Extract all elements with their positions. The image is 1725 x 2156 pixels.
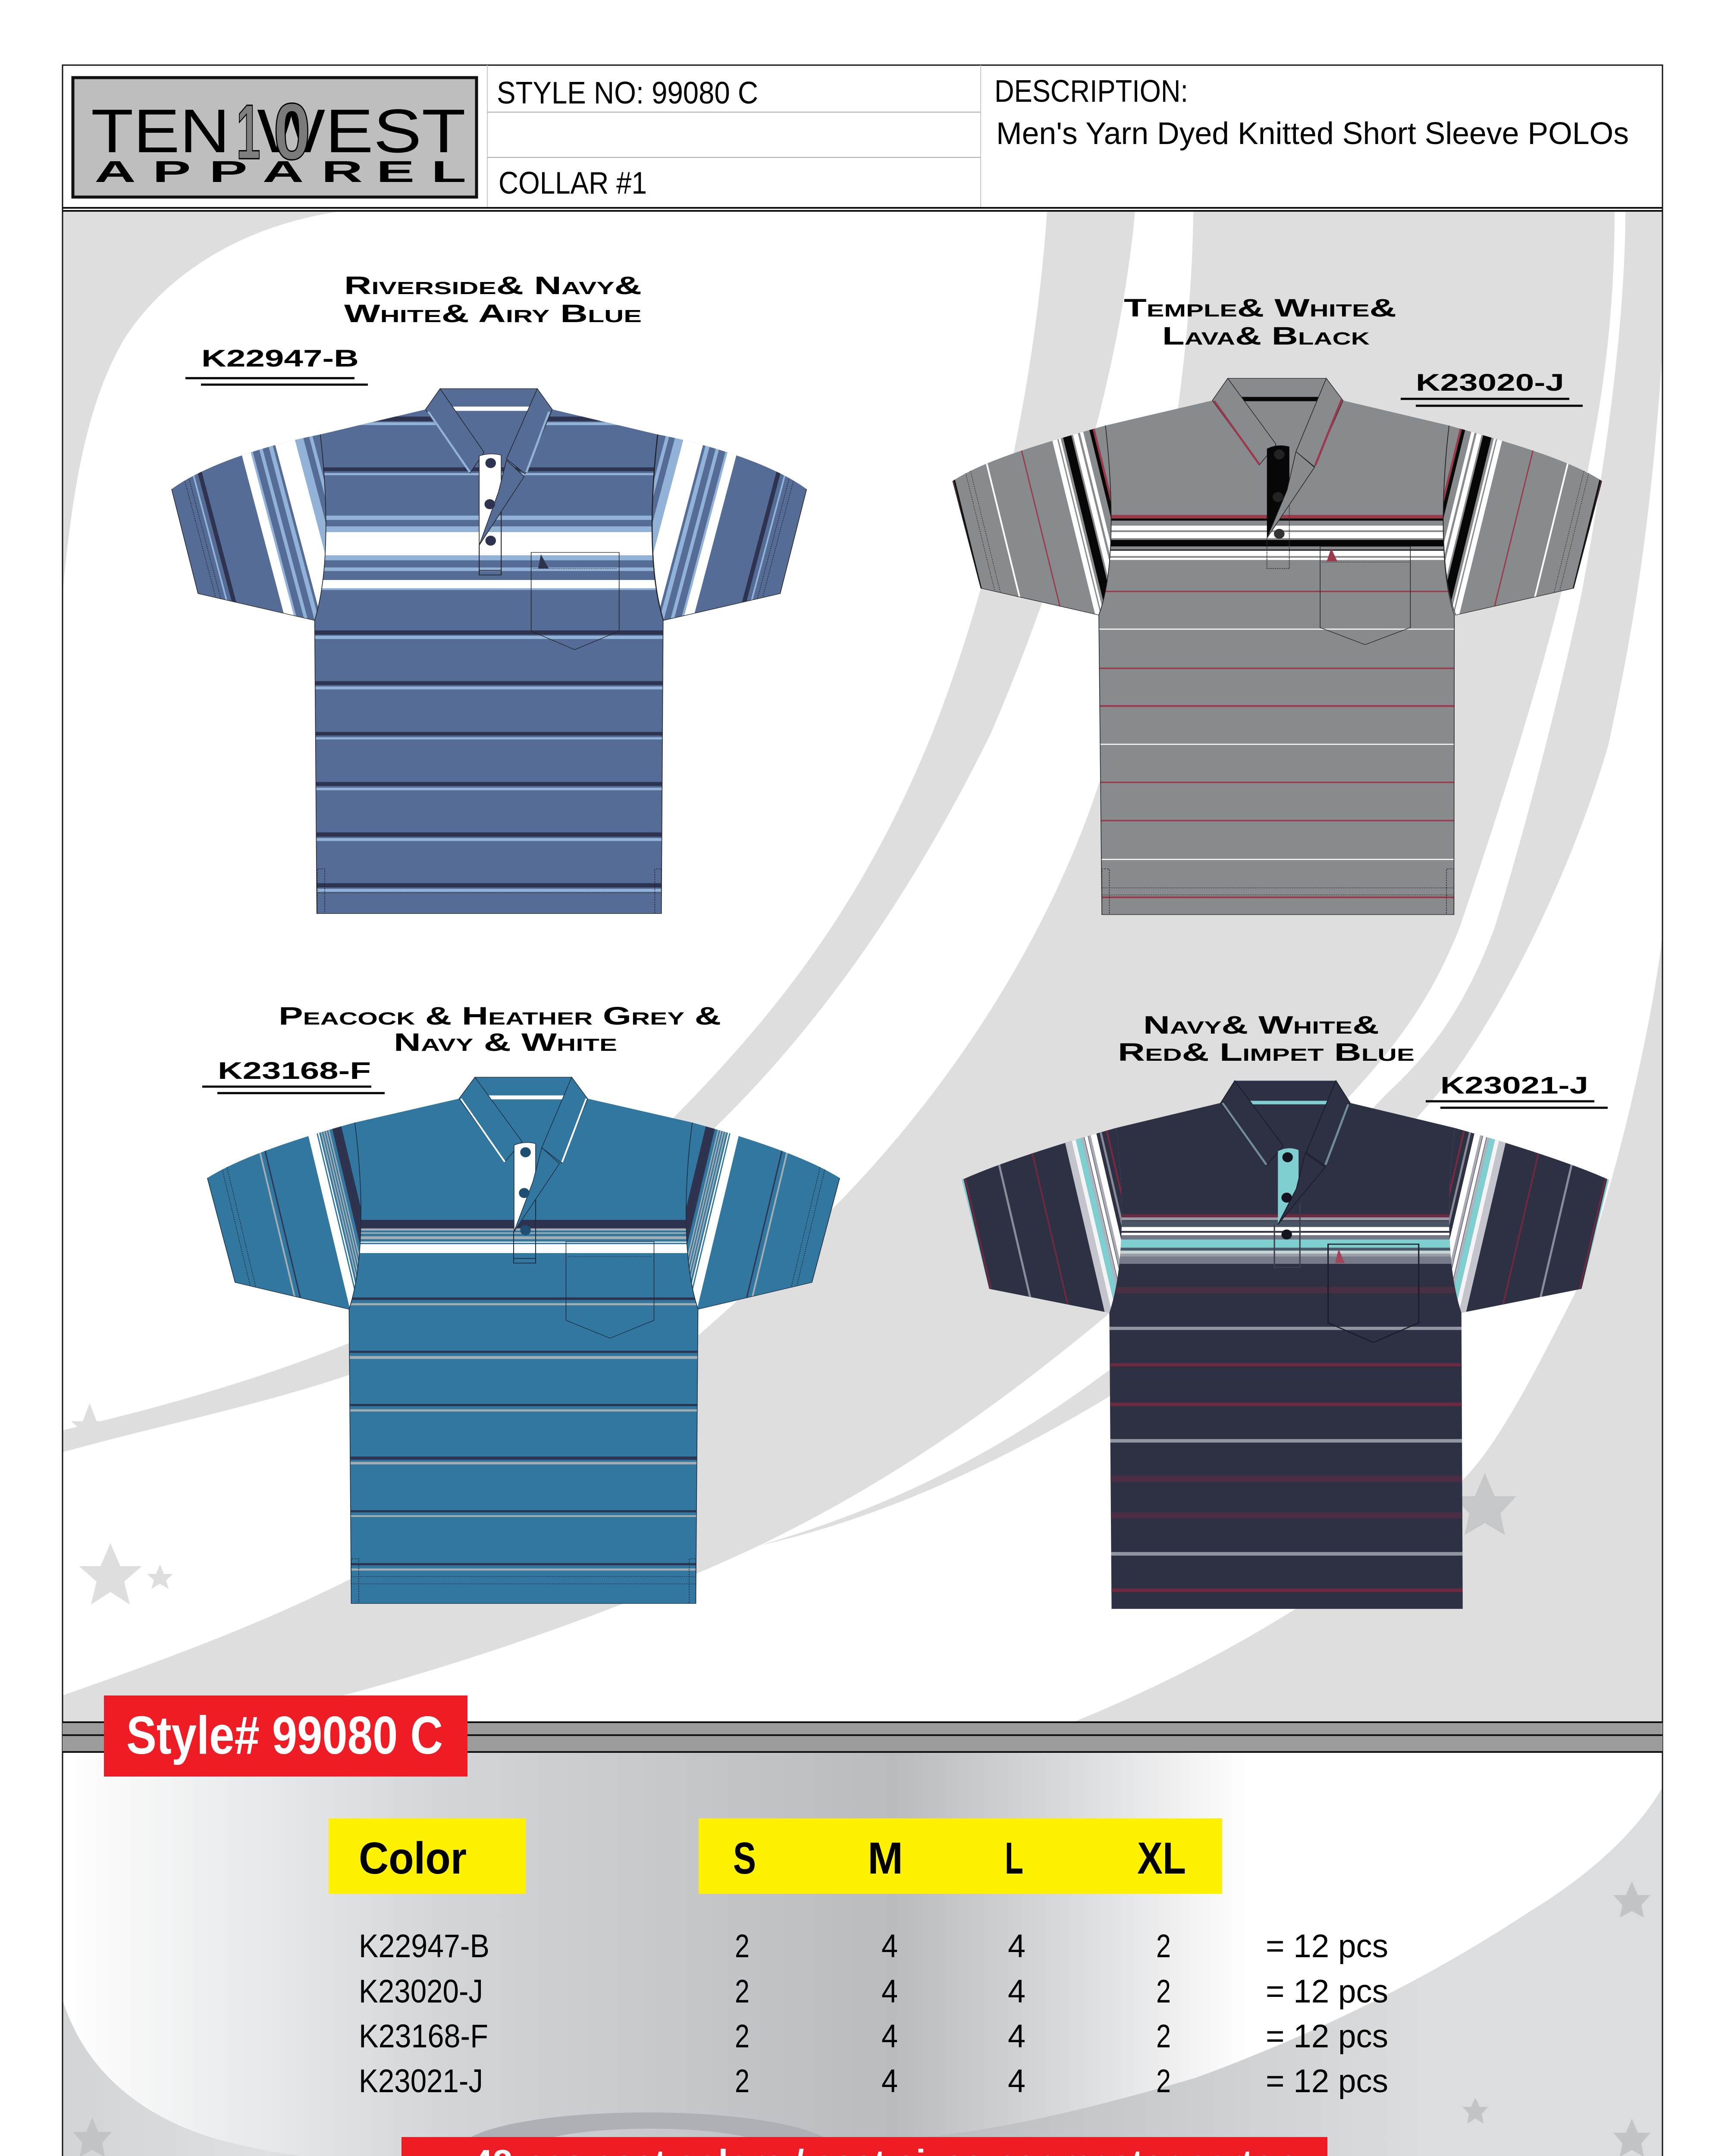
chest pocket [566,1242,654,1338]
table row: K23020-J: 4 [881,1973,898,2010]
swoosh: right band tapering to a sliver [759,211,1663,1545]
table row: K23020-J: 4 [1008,1973,1026,2010]
swoosh: top-left corner [63,211,345,595]
style banner: Style# 99080 C [126,1706,443,1765]
table row: K23168-F: 4 [881,2018,898,2055]
collar note: COLLAR #1 [499,166,647,201]
table row: K23021-J: K23021-J [359,2063,483,2100]
table header: sizes: S [733,1833,756,1883]
table header: sizes: M [868,1833,903,1883]
colourway label: K23020-J: Temple& White& [1124,294,1396,322]
placket and buttons [479,454,524,575]
icon: star right [1453,1473,1516,1535]
table row: K22947-B: 2 [735,1928,750,1965]
table row: K23168-F: 2 [1156,2018,1171,2055]
colourway label: K23168-F [202,1002,721,1093]
polo shirt: K22947-B blue [164,389,814,914]
table row: K23021-J: 4 [881,2063,898,2100]
polo shirt: K23168-F teal [204,1077,844,1604]
polo shirt: K23020-J grey [932,378,1623,915]
description text: Men's Yarn Dyed Knitted Short Sleeve POLOs [996,116,1629,151]
logo: 0 [273,87,310,176]
table header: sizes: L [1005,1833,1023,1883]
polo shirt: K23021-J navy [941,1081,1629,1609]
corner shape lower left [63,2000,401,2156]
logo: 1 [236,89,260,175]
swoosh: lower right corner [1066,931,1663,1725]
table row: K22947-B [359,1928,1388,1965]
table header: colour: Color [359,1833,467,1883]
header block [63,65,1662,211]
table row: K23168-F [359,2018,1388,2055]
colourway label: K23021-J [1118,1011,1608,1108]
table row: K23168-F: 4 [1008,2018,1026,2055]
logo [73,78,477,197]
colourway label: K22947-B: Riverside& Navy& [344,272,642,300]
style number: STYLE NO: 99080 C [497,76,758,110]
table row: K23020-J: 2 [735,1973,750,2010]
colourway label: K23020-J [1124,294,1583,406]
swoosh: wide band [63,211,1615,1724]
lower panel background [63,1752,1662,2156]
table header: sizes: XL [1137,1833,1186,1883]
icon: star left upper [71,1403,108,1438]
icon: star lower right 1 [1613,1881,1650,1918]
icon: star left large [79,1543,142,1604]
colourway label: K23021-J: Navy& White& [1143,1011,1379,1039]
placket and buttons [1267,445,1314,568]
placket and buttons [1274,1148,1325,1267]
icon: star lower right 3 [1613,2119,1650,2156]
colourway label: K23168-F: Peacock & Heather Grey & [279,1002,721,1030]
table row: K23020-J: = 12 pcs [1266,1973,1388,2010]
header dividers [487,65,981,208]
chest pocket [531,552,619,650]
table header: colour [329,1818,526,1894]
logo: APPAREL [94,155,466,188]
colourway label: K22947-B: K22947-B [201,345,359,372]
divider band [63,1722,1662,1752]
table row: K22947-B: = 12 pcs [1266,1928,1388,1965]
table row: K22947-B: 4 [881,1928,898,1965]
icon: star lower left [73,2117,112,2156]
table row: K23021-J [359,2063,1388,2100]
colourway label: K23020-J: Lava& Black [1162,322,1370,350]
collar [1212,378,1343,467]
colourway label: K23168-F: K23168-F [218,1057,371,1084]
gradient panel [63,1752,1662,2156]
logo: WEST [257,97,466,166]
table row: K23168-F: 2 [735,2018,750,2055]
collar [1221,1081,1350,1166]
table row: K23168-F: K23168-F [359,2018,488,2055]
icon: star left small [147,1564,173,1589]
chest pocket [1320,546,1410,645]
table row: K23021-J: 4 [1008,2063,1026,2100]
table row: K23168-F: = 12 pcs [1266,2018,1388,2055]
arc at bottom centre [471,2112,823,2137]
table row: K22947-B: 4 [1008,1928,1026,1965]
collar [459,1077,587,1163]
table row: K23020-J: K23020-J [359,1973,483,2010]
chest pocket [1328,1244,1419,1342]
table header: sizes [699,1818,1222,1894]
placket and buttons [514,1143,559,1263]
table row: K23020-J: 2 [1156,1973,1171,2010]
table row: K23020-J [359,1973,1388,2010]
style banner [104,1695,467,1777]
table row: K23021-J: = 12 pcs [1266,2063,1388,2100]
colourway label: K23021-J: K23021-J [1440,1072,1588,1099]
table row: K23021-J: 2 [735,2063,750,2100]
background swooshes: upper panel [63,211,1663,1725]
table row: K23021-J: 2 [1156,2063,1171,2100]
description label: DESCRIPTION: [994,74,1188,109]
colourway label: K22947-B: White& Airy Blue [344,300,642,328]
logo: TEN [91,97,230,166]
colourway label: K23168-F: Navy & White [394,1028,617,1056]
swoosh: narrow band with tail [63,211,1135,1452]
collar [426,389,552,474]
colourway label: K23021-J: Red& Limpet Blue [1118,1038,1414,1066]
table row: K22947-B: K22947-B [359,1928,489,1965]
colourway label: K23020-J: K23020-J [1416,369,1564,396]
icon: star lower right 2 [1462,2098,1488,2124]
table row: K22947-B: 2 [1156,1928,1171,1965]
corner shape lower right [906,1787,1662,2156]
header double rule [63,208,1662,211]
colourway label: K22947-B [185,272,642,385]
